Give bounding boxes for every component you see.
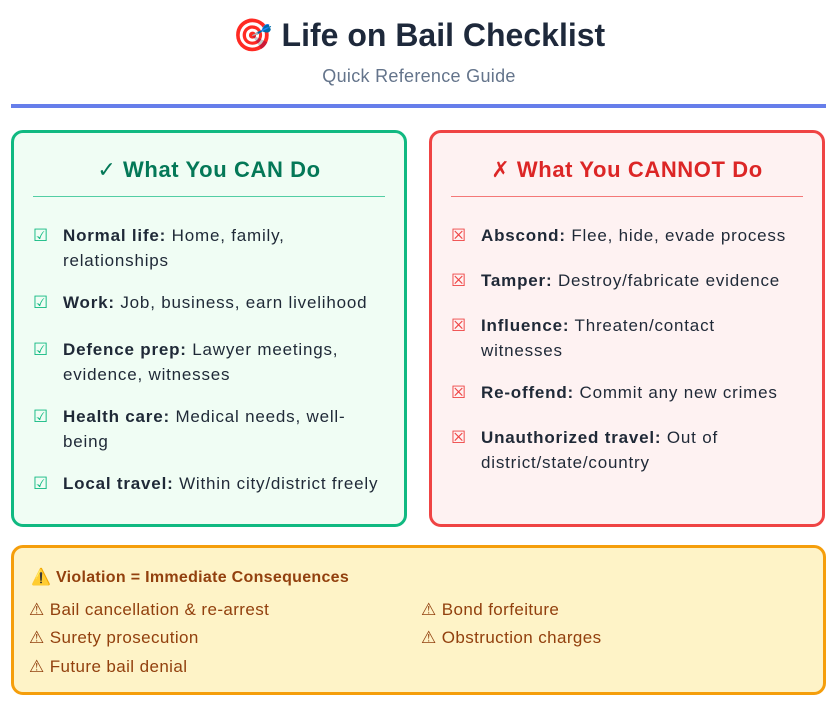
title: 🎯 Life on Bail Checklist bbox=[233, 17, 605, 53]
list: cannot items: ☒ bbox=[451, 316, 466, 335]
list: cannot items: Tamper: Destroy/fabricate evidence bbox=[481, 271, 780, 290]
list: can items: ☑ bbox=[33, 340, 48, 359]
consequence items: ⚠ Bail cancellation & re-arrest bbox=[29, 600, 269, 619]
callout: violation consequences bbox=[11, 545, 826, 695]
list: cannot items: ☒ bbox=[451, 226, 466, 245]
list: can items: ☑ bbox=[33, 226, 48, 245]
warning heading: ⚠️ Violation = Immediate Consequences bbox=[31, 569, 349, 586]
list: cannot items: ☒ bbox=[451, 428, 466, 447]
list: cannot items: ☒ bbox=[451, 271, 466, 290]
callout: violation consequences: ⚠ Surety prosecution bbox=[29, 628, 199, 647]
list: cannot items bbox=[451, 226, 786, 472]
list: can items: Health care: Medical needs, well-being bbox=[63, 407, 345, 451]
list: can items: ☑ bbox=[33, 407, 48, 426]
panel: can do bbox=[11, 130, 407, 527]
list: can items: ☑ bbox=[33, 474, 48, 493]
callout: violation consequences: ⚠ Obstruction charges bbox=[421, 628, 602, 647]
heading: cannot: ✗ What You CANNOT Do bbox=[491, 157, 763, 182]
panel: cannot do bbox=[429, 130, 825, 527]
subtitle: Quick Reference Guide bbox=[322, 66, 516, 86]
callout: violation consequences: ⚠ Bond forfeiture bbox=[421, 600, 559, 619]
list: can items: Work: Job, business, earn livelihood bbox=[63, 293, 367, 312]
callout: violation consequences: ⚠ Future bail denial bbox=[29, 657, 187, 676]
list: cannot items: Abscond: Flee, hide, evade process bbox=[481, 226, 786, 245]
list: cannot items: Unauthorized travel: Out of district/state/country bbox=[481, 428, 718, 472]
list: can items: ☑ bbox=[33, 293, 48, 312]
list: cannot items: Influence: Threaten/contact witnesses bbox=[481, 316, 715, 360]
list: cannot items: Re-offend: Commit any new crimes bbox=[481, 383, 778, 402]
heading: can: ✓ What You CAN Do bbox=[97, 157, 321, 182]
list: cannot items: ☒ bbox=[451, 383, 466, 402]
list: can items: Normal life: Home, family, relationships bbox=[63, 226, 285, 270]
list: can items: Defence prep: Lawyer meetings, evidence, witnesses bbox=[63, 340, 338, 384]
list: can items: Local travel: Within city/district freely bbox=[63, 474, 378, 493]
list: can items bbox=[33, 226, 378, 493]
